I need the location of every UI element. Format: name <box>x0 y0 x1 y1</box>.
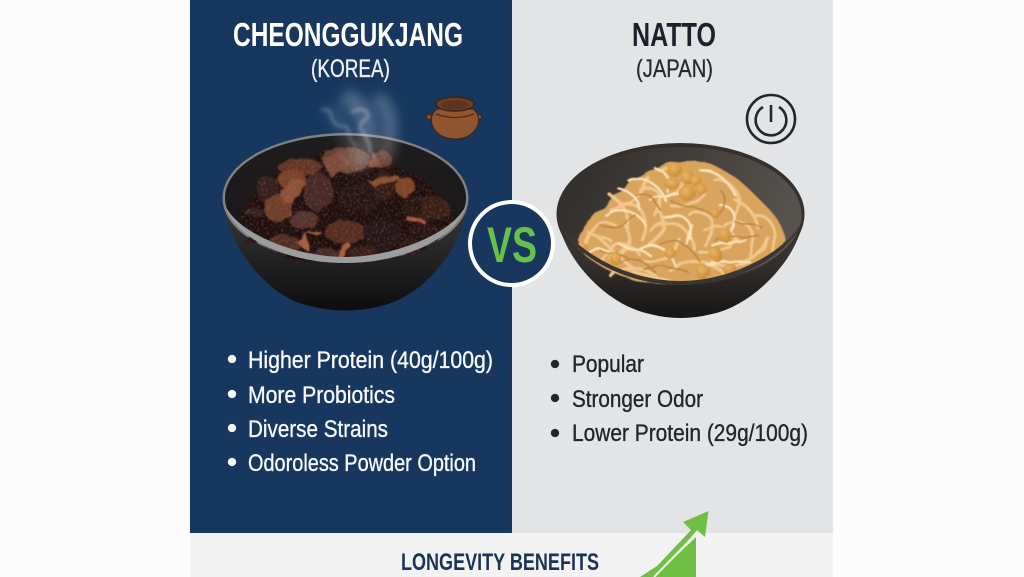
panel: longevity benefits band <box>190 511 833 577</box>
icon: clay pot <box>426 97 482 139</box>
text block: cheonggukjang bullet list: Higher Protein (40g/100g) <box>248 347 493 374</box>
vs badge <box>470 202 553 285</box>
food: fermented soybeans <box>238 145 454 263</box>
subheading: korea: (KOREA) <box>311 55 390 83</box>
text block: natto bullet list: Stronger Odor <box>572 386 703 413</box>
subheading: japan: (JAPAN) <box>636 55 713 83</box>
heading: natto: NATTO <box>632 16 716 53</box>
beans <box>578 164 737 280</box>
text block: cheonggukjang bullet list: Odoroless Powder Option <box>248 450 476 477</box>
text block: cheonggukjang bullet list: Diverse Strains <box>248 416 388 443</box>
food: natto noodles and beans <box>578 161 785 284</box>
text block: cheonggukjang bullet list <box>228 347 493 477</box>
panel: natto <box>512 0 833 533</box>
steam <box>322 100 390 165</box>
bowl: cheonggukjang <box>222 133 468 310</box>
panel: cheonggukjang <box>190 0 512 533</box>
text block: natto bullet list: Popular <box>572 351 644 378</box>
heading: longevity benefits: LONGEVITY BENEFITS <box>401 549 599 576</box>
bowl: natto <box>556 143 804 318</box>
vs badge: VS <box>487 217 537 273</box>
text block: natto bullet list: Lower Protein (29g/100g) <box>572 420 808 447</box>
text block: natto bullet list <box>551 351 808 447</box>
text block: cheonggukjang bullet list: More Probiotics <box>248 382 395 409</box>
icon: power circle <box>747 95 795 143</box>
heading: cheonggukjang: CHEONGGUKJANG <box>233 16 463 53</box>
icon: green growth arrow <box>640 511 708 577</box>
